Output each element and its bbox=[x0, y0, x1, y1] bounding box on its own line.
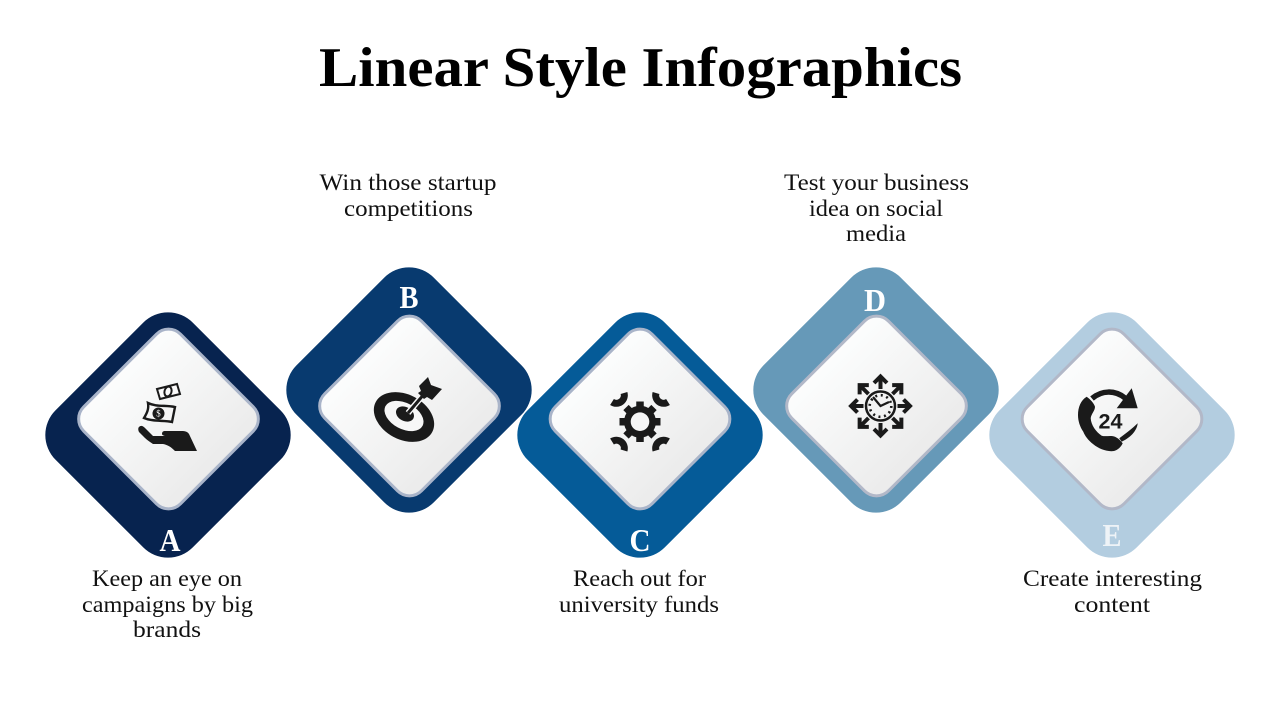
text: D caption bbox=[784, 170, 969, 246]
outer diamond D bbox=[739, 253, 1013, 527]
icon: target with dart bbox=[365, 377, 443, 452]
outer diamond B bbox=[272, 253, 546, 527]
text: E caption: Create interesting bbox=[1023, 566, 1203, 591]
letter E: E bbox=[1102, 517, 1122, 553]
outer diamond E bbox=[975, 298, 1249, 572]
inner diamond E bbox=[1015, 322, 1209, 516]
text: C caption: university funds bbox=[559, 592, 719, 617]
text: C caption: Reach out for bbox=[573, 566, 706, 591]
icon: money falling into hand bbox=[138, 384, 197, 451]
panel: D bbox=[739, 253, 1013, 527]
text: E caption bbox=[1023, 566, 1203, 617]
text: A caption: campaigns by big bbox=[82, 592, 254, 617]
text: B caption bbox=[320, 170, 496, 221]
text: A caption: brands bbox=[133, 617, 201, 642]
outer diamond C bbox=[503, 298, 777, 572]
inner diamond A bbox=[72, 322, 265, 516]
text: B caption: Win those startup bbox=[320, 170, 496, 195]
text: D caption: idea on social bbox=[809, 196, 943, 221]
letter B: B bbox=[400, 279, 418, 315]
panel: B bbox=[272, 253, 546, 527]
icon: gear with wrenches bbox=[612, 393, 668, 450]
outer diamond A bbox=[31, 298, 305, 572]
icon: 24-hour phone bbox=[1078, 388, 1138, 451]
text: D caption: Test your business bbox=[784, 170, 969, 195]
text: A caption: Keep an eye on bbox=[92, 566, 243, 591]
inner diamond B bbox=[313, 309, 506, 503]
text: A caption bbox=[82, 566, 254, 642]
letter C: C bbox=[630, 522, 650, 558]
text: C caption bbox=[559, 566, 719, 617]
panel: A bbox=[31, 298, 305, 572]
icon: clock with outward arrows bbox=[851, 376, 910, 436]
text: D caption: media bbox=[846, 221, 906, 246]
icon: 24-hour phone: 24 bbox=[1099, 409, 1122, 433]
icon: money falling into hand: $ bbox=[156, 408, 161, 418]
letter D: D bbox=[864, 282, 886, 318]
inner diamond C bbox=[543, 322, 737, 516]
inner diamond D bbox=[780, 309, 973, 503]
title: Linear Style Infographics bbox=[319, 37, 962, 99]
text: B caption: competitions bbox=[344, 196, 473, 221]
panel: C bbox=[503, 298, 777, 572]
panel: E bbox=[975, 298, 1249, 572]
text: E caption: content bbox=[1074, 592, 1151, 617]
letter A: A bbox=[160, 522, 180, 558]
